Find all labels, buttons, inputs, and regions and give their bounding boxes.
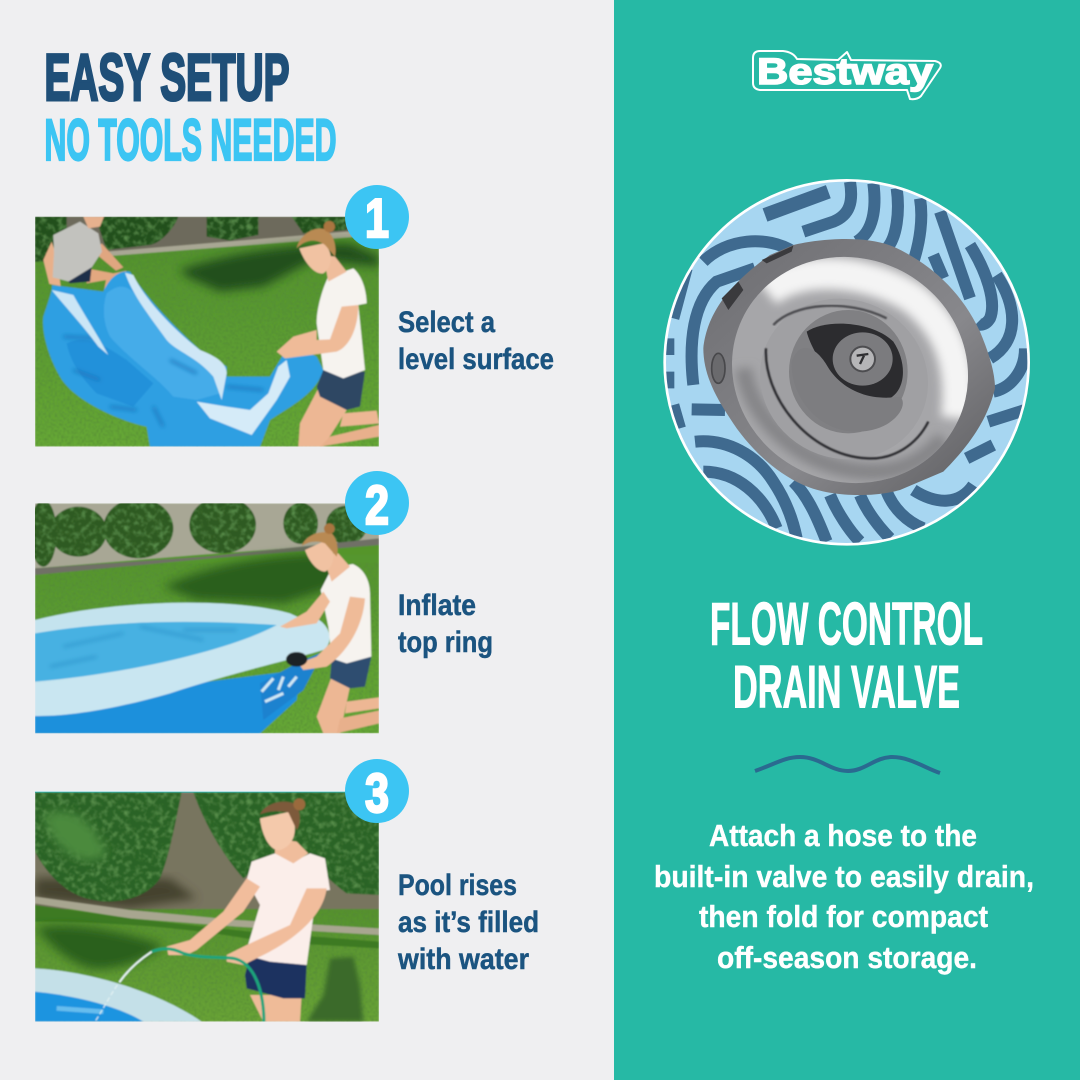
- step 2 number badge: 2: [365, 474, 389, 536]
- step 1 caption: level surface: [398, 343, 554, 376]
- description text: then fold for compact: [699, 899, 988, 934]
- pool: [35, 603, 330, 733]
- woman: [277, 221, 379, 447]
- step 3 caption: as it’s filled: [398, 906, 539, 939]
- description text: Attach a hose to the: [709, 818, 977, 853]
- title: NO TOOLS NEEDED: [44, 108, 336, 173]
- description text: off-season storage.: [717, 940, 977, 975]
- step 1 caption: [398, 306, 554, 376]
- step 1 caption: Select a: [398, 306, 495, 339]
- hose and water: [95, 949, 264, 1022]
- pool liner: [43, 271, 323, 447]
- valve centre screw: [833, 332, 893, 386]
- step 1 photo: unfolding the pool: [35, 217, 379, 447]
- step 2 number badge: [345, 471, 409, 536]
- circle: drain valve illustration: [665, 180, 1029, 544]
- step 3 caption: [397, 869, 539, 976]
- step 1 number badge: [345, 185, 409, 249]
- step 2 caption: [398, 589, 493, 659]
- wave divider: [755, 757, 940, 773]
- step 2 photo: inflating top ring: [30, 497, 379, 733]
- background: left panel: [0, 0, 614, 1080]
- woman: [280, 523, 379, 733]
- heading: flow control drain valve: [710, 590, 983, 720]
- step 2 caption: Inflate: [398, 589, 476, 622]
- step 3 number badge: [345, 759, 409, 824]
- pool edge: [35, 968, 202, 1022]
- step 3 photo: filling with water: [35, 792, 379, 1022]
- man: [43, 217, 127, 291]
- valve body: [703, 239, 995, 495]
- description text: [654, 818, 1034, 975]
- title: [44, 40, 336, 173]
- description text: built-in valve to easily drain,: [654, 859, 1034, 894]
- step 3 number badge: 3: [365, 762, 389, 824]
- step 2 caption: top ring: [398, 626, 493, 659]
- title: EASY SETUP: [44, 40, 290, 114]
- wave pattern: [668, 182, 1025, 542]
- valve threaded ring: [695, 218, 1005, 522]
- woman: [167, 798, 330, 1022]
- valve inner chamber: [789, 310, 908, 433]
- Bestway logo: Bestway: [757, 51, 933, 92]
- background: right teal panel: [614, 0, 1080, 1080]
- Bestway logo: [753, 51, 941, 99]
- step 3 caption: with water: [397, 943, 529, 976]
- step 3 caption: Pool rises: [398, 869, 517, 902]
- step 1 number badge: 1: [365, 187, 389, 249]
